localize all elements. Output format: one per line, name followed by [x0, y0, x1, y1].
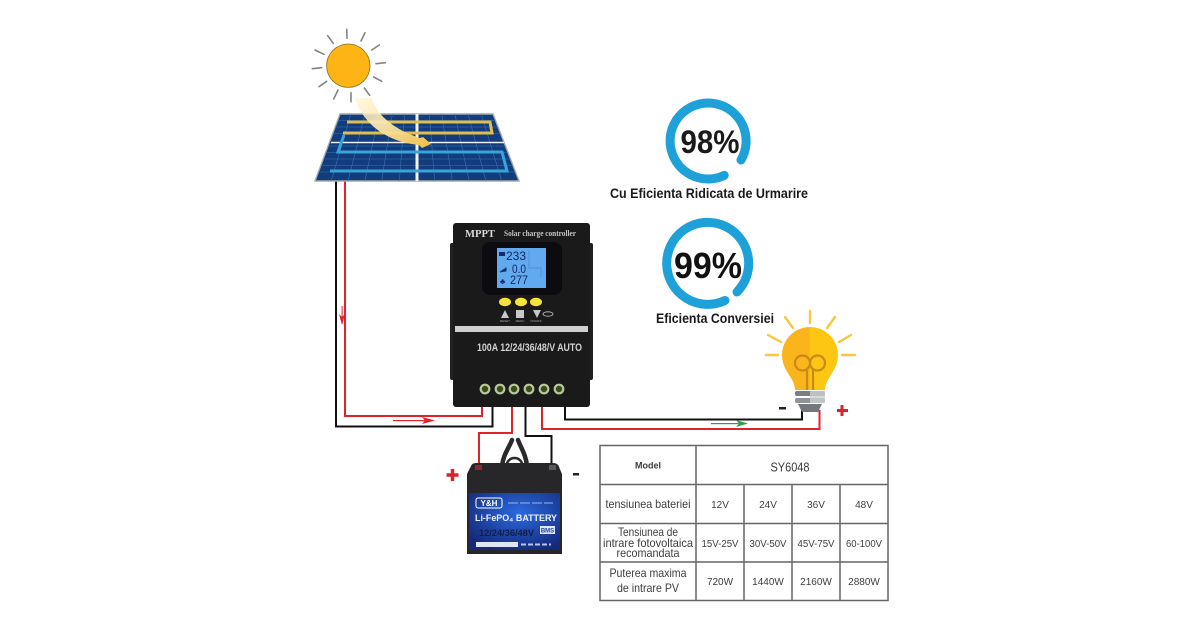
table row: recommended PV input voltage: 45V-75V — [798, 539, 835, 550]
table row: model: SY6048 — [770, 460, 810, 474]
battery plus sign — [446, 469, 458, 481]
table row: recommended PV input voltage: recomandata — [616, 546, 680, 560]
infographic: MPPT wiring diagram — [312, 28, 889, 602]
table row: battery voltage: 12V — [711, 500, 729, 511]
arrow: current to lamp — [711, 420, 748, 427]
table row: battery voltage: 24V — [759, 500, 777, 511]
arrow: panel current down — [339, 306, 345, 325]
battery voltage: 12/24/36/48V — [479, 528, 534, 538]
table row: maximum PV input power: Puterea maxima — [610, 566, 687, 580]
table row: maximum PV input power — [610, 566, 880, 595]
table row: battery voltage: 36V — [807, 500, 825, 511]
buttons: RESET — [500, 319, 510, 323]
icon: light bulb — [766, 311, 855, 412]
icon: battery — [467, 440, 562, 554]
icon: solar panel — [314, 98, 520, 182]
table row: recommended PV input voltage: intrare fotovoltaica — [603, 536, 693, 550]
table row: recommended PV input voltage — [603, 525, 882, 560]
table row: battery voltage: tensiunea bateriei — [606, 497, 690, 511]
table row: recommended PV input voltage: 60-100V — [846, 539, 882, 550]
table row: recommended PV input voltage: Tensiunea de — [618, 525, 678, 539]
table row: maximum PV input power: 2160W — [800, 577, 832, 588]
table row: maximum PV input power: 1440W — [752, 577, 784, 588]
table row: maximum PV input power: 2880W — [848, 577, 880, 588]
stat: 99% conversion efficiency: 99% — [674, 245, 742, 286]
arrow: current to controller — [393, 417, 435, 424]
silver strip — [455, 326, 588, 332]
table row: model — [635, 460, 810, 474]
lamp minus sign — [779, 407, 786, 410]
table row: recommended PV input voltage: 30V-50V — [750, 539, 787, 550]
icon: sunlight beam arrow — [355, 98, 431, 148]
table row: maximum PV input power: 720W — [707, 577, 734, 588]
terminals — [481, 385, 563, 393]
stat: 98% tracking efficiency — [610, 103, 808, 201]
controller subtitle: Solar charge controller — [504, 229, 576, 238]
table row: battery voltage: 48V — [855, 500, 873, 511]
buttons: MENU — [516, 319, 524, 323]
panel: MPPT controller — [450, 223, 593, 407]
BMS badge: BMS — [541, 528, 554, 534]
buttons — [499, 298, 553, 323]
LCD display — [497, 248, 546, 288]
controller title: MPPT — [465, 229, 495, 240]
table row: maximum PV input power: de intrare PV — [617, 581, 679, 595]
table row: battery voltage — [606, 497, 873, 511]
lamp plus sign — [837, 405, 848, 416]
caption: conversion efficiency: Eficienta Conversiei — [656, 310, 774, 326]
icon: sun — [312, 29, 385, 102]
LCD display: 0.0 — [512, 262, 526, 276]
LCD display: 233 — [506, 249, 526, 263]
table: specifications — [600, 445, 888, 601]
stat: 98% tracking efficiency: 98% — [680, 124, 740, 160]
buttons: ON/OFF — [530, 319, 542, 323]
table row: model: Model — [635, 460, 661, 472]
LCD display: 277 — [510, 275, 528, 287]
table row: recommended PV input voltage: 15V-25V — [702, 539, 739, 550]
display surround — [482, 242, 562, 295]
stat: 99% conversion efficiency — [656, 222, 774, 326]
battery type: Li-FePO₄ BATTERY — [475, 513, 558, 524]
caption: tracking efficiency: Cu Eficienta Ridicata de Urmarire — [610, 185, 808, 201]
wires: panel, controller, battery and lamp connections — [336, 181, 820, 470]
LCD display: ♣ — [500, 277, 506, 286]
battery brand: Y&H — [481, 499, 498, 508]
model label: 100A 12/24/36/48/V AUTO — [477, 342, 582, 354]
battery minus sign — [573, 473, 579, 476]
